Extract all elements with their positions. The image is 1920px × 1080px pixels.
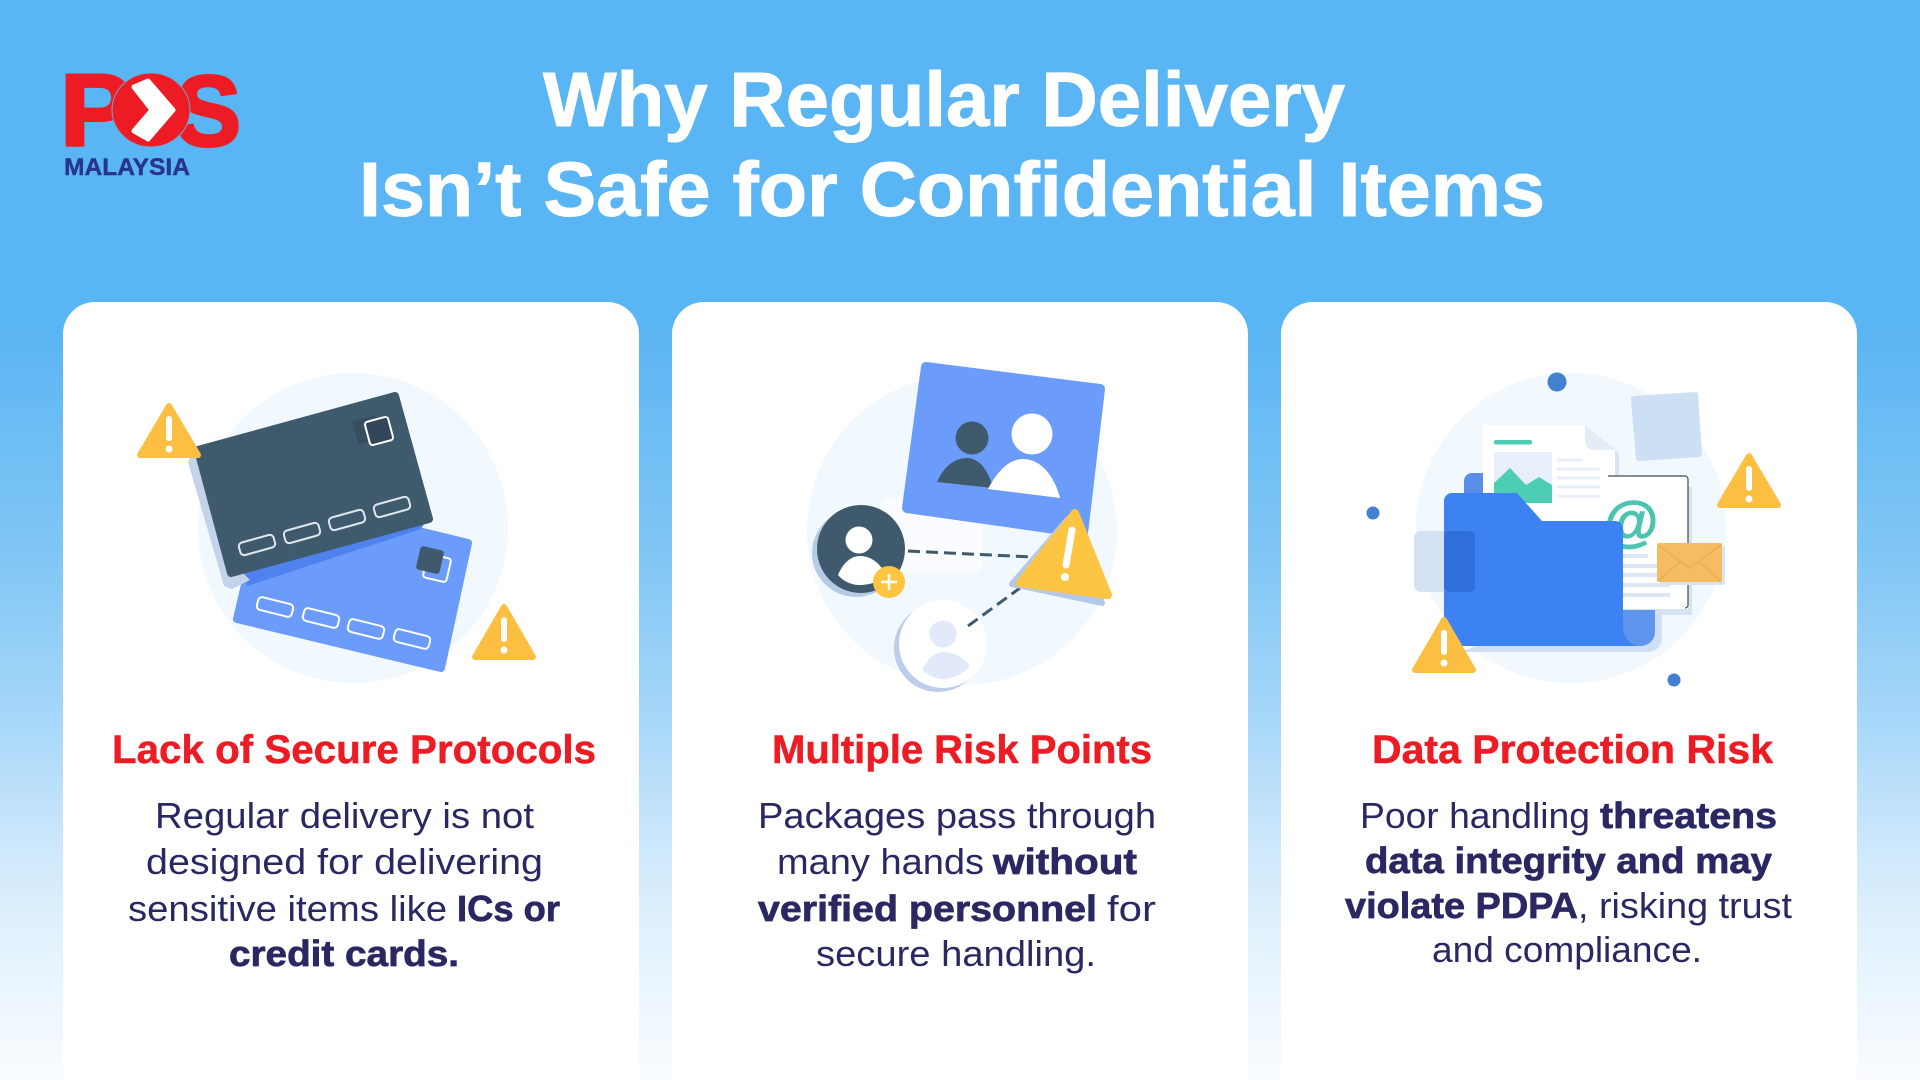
body text: designed for delivering <box>146 841 543 882</box>
illustration: credit cards <box>140 373 533 683</box>
icon: blue credit card <box>237 494 468 668</box>
body text: sensitive items like <box>128 888 447 929</box>
illustration: people and risk <box>807 367 1117 692</box>
heading: lack of secure protocols: Lack of Secure Protocols <box>112 728 596 772</box>
body text: verified personnel <box>758 888 1097 929</box>
body text <box>128 795 560 974</box>
heading: data protection risk: Data Protection Risk <box>1372 728 1774 772</box>
logo: Pos Malaysia: P <box>60 54 132 168</box>
document with chart <box>1483 425 1619 530</box>
icon: warning triangle <box>475 607 533 657</box>
body text: Regular delivery is not <box>155 795 534 836</box>
icon: dark user avatar <box>812 505 905 598</box>
body text: without <box>992 841 1137 882</box>
translucent square <box>1414 531 1475 592</box>
icon: faded user avatar <box>894 600 987 692</box>
document with email symbol <box>1604 476 1692 615</box>
logo: Pos Malaysia: MALAYSIA <box>64 154 190 181</box>
icon: warning triangle <box>1720 456 1778 505</box>
body text: violate PDPA <box>1345 885 1578 926</box>
folder shadow <box>1460 600 1662 652</box>
folder back tab <box>1464 473 1490 500</box>
decorative dots <box>1366 372 1680 686</box>
logo: Pos Malaysia <box>60 54 241 181</box>
dashed connector lines <box>908 551 1032 626</box>
panel: data protection risk <box>1281 302 1857 1080</box>
icon: envelope <box>1657 543 1725 585</box>
title <box>359 57 1545 233</box>
body text: , risking trust <box>1578 885 1792 926</box>
title: Isn’t Safe for Confidential Items <box>359 147 1545 233</box>
body text: data integrity and may <box>1365 840 1772 881</box>
body text: for <box>1107 888 1156 929</box>
icon: dark credit card <box>188 396 429 589</box>
document with email symbol: @ <box>1604 489 1658 552</box>
title: Why Regular Delivery <box>543 57 1345 143</box>
body text: ICs or <box>457 888 560 929</box>
logo: Pos Malaysia: S <box>176 56 241 168</box>
illustration: folder and documents <box>1366 372 1778 686</box>
icon: large warning triangle <box>1012 513 1108 603</box>
icon: warning triangle <box>140 406 198 455</box>
body text: many hands <box>777 841 984 882</box>
body text <box>1345 795 1792 970</box>
heading: multiple risk points: Multiple Risk Points <box>772 728 1152 772</box>
icon: photo card with two people <box>907 367 1100 533</box>
folder front <box>1444 493 1655 646</box>
body text <box>758 795 1156 974</box>
panel: multiple risk points <box>672 302 1248 1080</box>
body text: secure handling. <box>816 933 1096 974</box>
card background <box>672 302 1248 1080</box>
card background <box>63 302 639 1080</box>
body text: threatens <box>1600 795 1777 836</box>
body text: Poor handling <box>1360 795 1590 836</box>
body text: credit cards. <box>229 933 459 974</box>
translucent square <box>1634 395 1699 458</box>
card background <box>1281 302 1857 1080</box>
body text: Packages pass through <box>758 795 1156 836</box>
icon: warning triangle <box>1415 620 1473 670</box>
panel: lack of secure protocols <box>63 302 639 1080</box>
body text: and compliance. <box>1432 929 1702 970</box>
